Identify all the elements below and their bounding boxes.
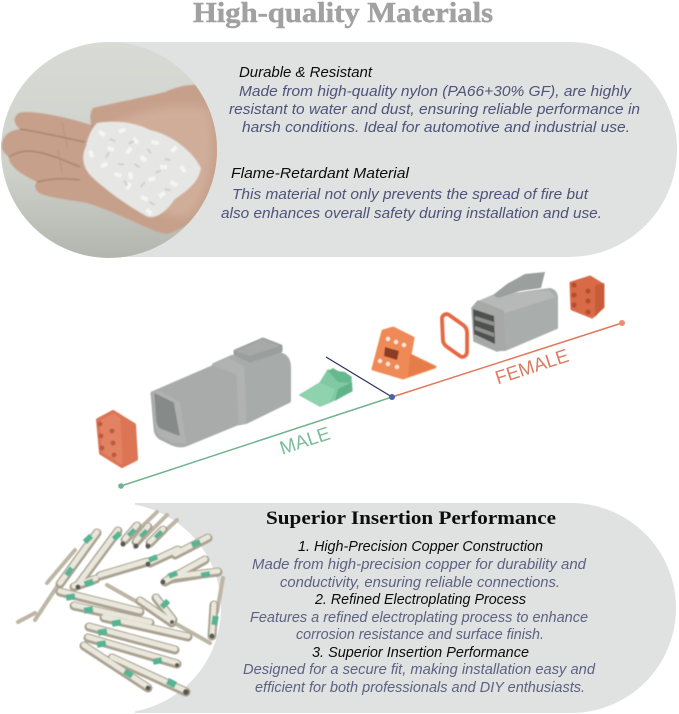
- panel background: [135, 503, 676, 713]
- panel: insertion performance: [11, 503, 676, 713]
- male seal: [98, 412, 136, 466]
- feature: superior insertion performance: 3. Superior Insertion Performance: [312, 645, 529, 661]
- feature: refined electroplating process: [250, 592, 588, 643]
- feature: high-precision copper construction: [252, 539, 587, 591]
- feature: high-precision copper construction: Made from high-precision copper for durability and: [252, 557, 587, 573]
- male axis line: [118, 397, 392, 489]
- text: durable and resistant: resistant to water and dust, ensuring reliable performance in: [229, 102, 640, 118]
- feature: superior insertion performance: Designed for a secure fit, making installation easy and: [243, 662, 596, 678]
- label: female: FEMALE: [493, 346, 572, 389]
- female seal: [571, 277, 604, 317]
- label: male: MALE: [277, 423, 333, 459]
- text: durable and resistant: Durable & Resistant: [239, 65, 373, 81]
- text: durable and resistant: Made from high-quality nylon (PA66+30% GF), are highly: [239, 84, 632, 100]
- male green wedge: [300, 368, 352, 406]
- feature: refined electroplating process: 2. Refined Electroplating Process: [314, 592, 526, 608]
- text: flame-retardant material: This material not only prevents the spread of fire but: [232, 187, 589, 203]
- photo: hand holding nylon pellets: [0, 40, 222, 260]
- male housing: [152, 339, 289, 446]
- female orange wedge: [373, 328, 435, 378]
- pellets: [83, 122, 201, 217]
- feature: high-precision copper construction: 1. High-Precision Copper Construction: [298, 539, 543, 555]
- feature: superior insertion performance: efficient for both professionals and DIY enthusiasts.: [255, 680, 585, 696]
- panel background: [109, 42, 677, 257]
- feature: refined electroplating process: Features a refined electroplating process to enhance: [250, 610, 588, 626]
- female axis line: [392, 320, 625, 397]
- text: durable and resistant: [229, 65, 640, 136]
- heading: superior insertion performance: Superior Insertion Performance: [266, 508, 556, 529]
- text: flame-retardant material: also enhances overall safety during installation and use.: [221, 206, 602, 222]
- female gasket: [442, 314, 467, 357]
- exploded connector diagram: [98, 272, 625, 489]
- feature: superior insertion performance: [243, 645, 596, 696]
- text: flame-retardant material: [221, 166, 602, 222]
- panel: materials: [0, 40, 677, 260]
- terminal group: [18, 512, 223, 643]
- feature: refined electroplating process: corrosion resistance and surface finish.: [296, 627, 544, 643]
- female housing: [472, 272, 557, 351]
- text: durable and resistant: harsh conditions. Ideal for automotive and industrial use.: [242, 120, 630, 136]
- divider line and centre dot: [326, 357, 395, 400]
- photo: crimp terminal pins: [11, 503, 223, 713]
- feature: high-precision copper construction: conductivity, ensuring reliable connections.: [280, 575, 560, 591]
- text: flame-retardant material: Flame-Retardant Material: [231, 166, 410, 182]
